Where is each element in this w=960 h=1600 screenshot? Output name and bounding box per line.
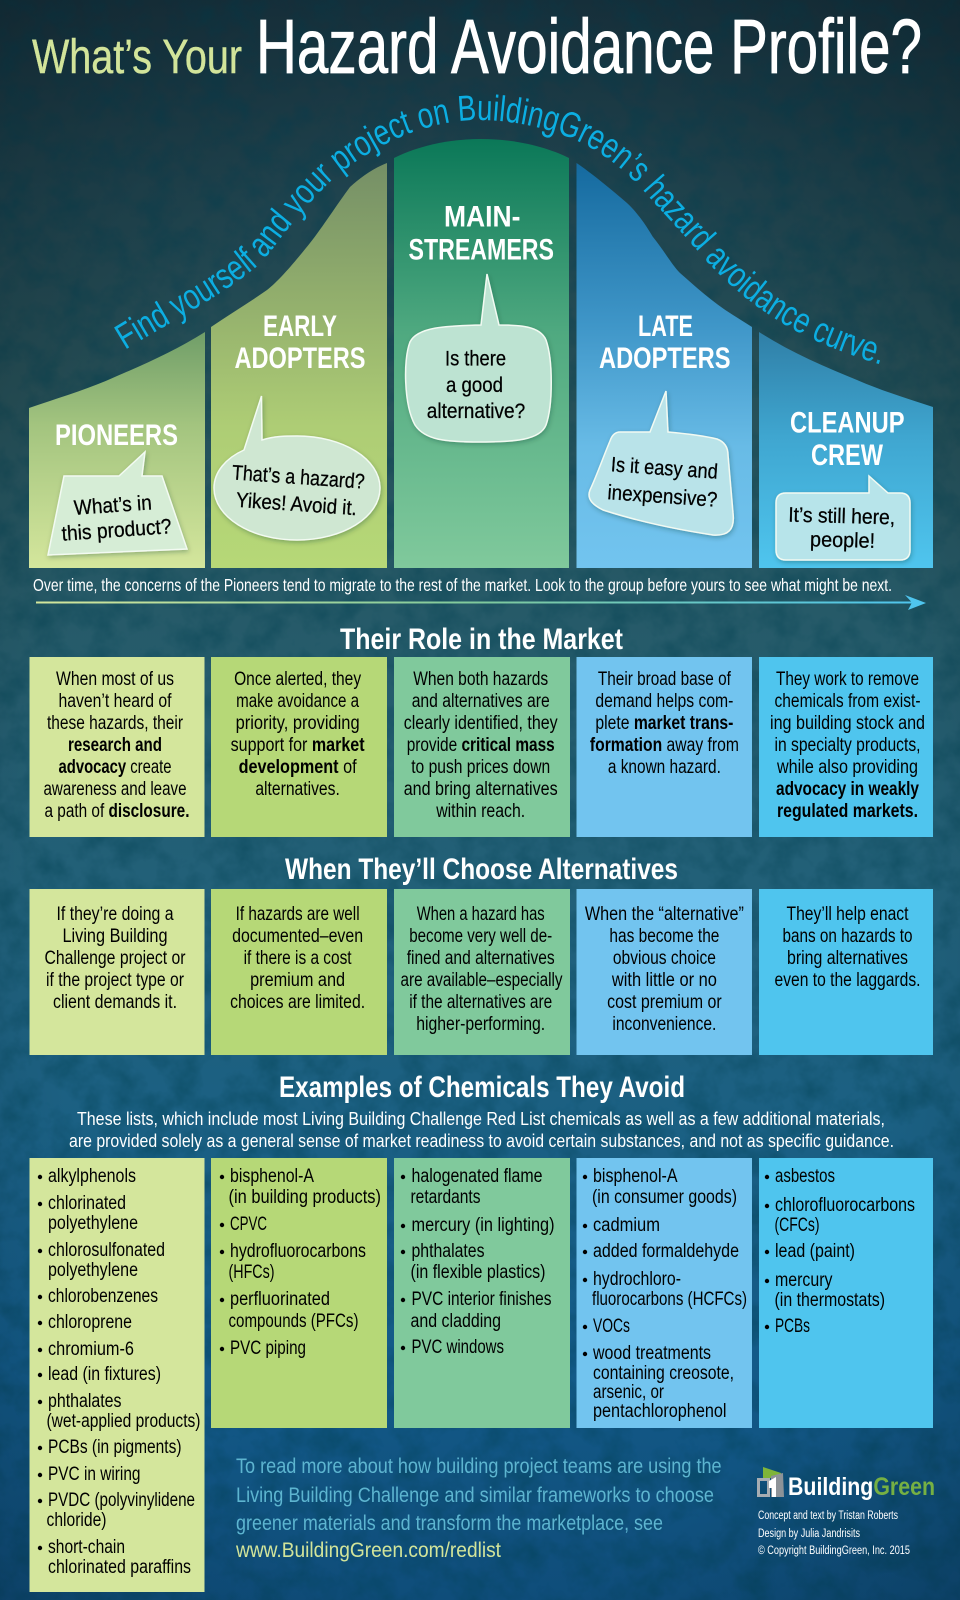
list: pioneers: phthalates [48, 1391, 122, 1412]
role: pioneers: awareness and leave [44, 779, 186, 800]
role: late adopters: plete market trans- [595, 713, 733, 734]
list: pioneers: PCBs (in pigments) [48, 1437, 182, 1458]
role: cleanup crew: while also providing [776, 757, 918, 778]
list: early adopters: bisphenol-A [230, 1166, 314, 1187]
arrow: time [36, 595, 926, 610]
speech bubble: late adopters: Is it easy and [610, 453, 719, 484]
list: cleanup crew: mercury [775, 1270, 833, 1291]
list: mainstreamers: PVC windows [412, 1337, 504, 1358]
role: early adopters: alternatives. [255, 779, 340, 800]
role: early adopters: make avoidance a [236, 691, 359, 712]
speech bubble: early adopters: That’s a hazard? [231, 461, 366, 494]
role: mainstreamers: provide critical mass [407, 735, 555, 756]
when: mainstreamers: When a hazard has [417, 904, 545, 925]
role: late adopters: formation away from [590, 735, 739, 756]
role: mainstreamers: within reach. [435, 801, 525, 822]
speech bubble: mainstreamers: a good [446, 374, 503, 397]
role: pioneers: these hazards, their [47, 713, 184, 734]
list: late adopters: wood treatments [592, 1343, 711, 1364]
speech bubble: mainstreamers [406, 274, 551, 442]
list: pioneers [30, 1158, 204, 1592]
list: late adopters: added formaldehyde [593, 1241, 739, 1262]
when: cleanup crew [759, 889, 933, 1055]
list: pioneers: PVC in wiring [48, 1464, 140, 1485]
list: late adopters: VOCs [593, 1316, 630, 1337]
role: pioneers: When most of us [56, 669, 174, 690]
speech bubble: pioneers: What’s in [73, 491, 153, 520]
role: mainstreamers: and bring alternatives [404, 779, 558, 800]
intro text: lists disclaimer [69, 1108, 894, 1151]
list: pioneers: chlorinated paraffins [48, 1557, 191, 1578]
call to action: read more: greener materials and transform the marketplace, see [236, 1512, 663, 1535]
list: late adopters: pentachlorophenol [593, 1401, 726, 1422]
when: mainstreamers: are available–especially [400, 970, 563, 991]
when: pioneers: client demands it. [53, 992, 177, 1013]
when: mainstreamers: fined and alternatives [407, 948, 555, 969]
role: cleanup crew: regulated markets. [777, 801, 918, 822]
list: mainstreamers [394, 1158, 570, 1428]
when: mainstreamers: if the alternatives are [409, 992, 552, 1013]
role: cleanup crew: They work to remove [776, 669, 919, 690]
list: early adopters: (in building products) [228, 1187, 381, 1208]
when: pioneers [30, 889, 204, 1055]
role: mainstreamers: When both hazards [413, 669, 548, 690]
speech bubble: early adopters: Yikes! Avoid it. [235, 489, 358, 520]
role: cleanup crew: ing building stock and [770, 713, 925, 734]
panel: mainstreamers curve [394, 139, 569, 568]
when: late adopters: inconvenience. [612, 1014, 716, 1035]
role: late adopters: a known hazard. [608, 757, 721, 778]
heading: cleanup crew: CLEANUP [790, 406, 904, 440]
when: pioneers: Living Building [62, 926, 168, 947]
when: pioneers: if the project type or [46, 970, 185, 991]
when: late adopters: cost premium or [607, 992, 722, 1013]
when: pioneers: Challenge project or [44, 948, 186, 969]
heading: mainstreamers: STREAMERS [408, 234, 554, 266]
list: mainstreamers: and cladding [410, 1311, 501, 1332]
list: early adopters: PVC piping [230, 1338, 306, 1359]
list: early adopters: compounds (PFCs) [228, 1311, 358, 1332]
role: mainstreamers: clearly identified, they [404, 713, 558, 734]
panel: late adopters curve [576, 163, 752, 568]
speech bubble: late adopters [589, 391, 733, 535]
list: mainstreamers: phthalates [412, 1241, 484, 1262]
speech bubble: early adopters [214, 396, 380, 540]
list: cleanup crew: PCBs [775, 1316, 810, 1337]
panel: early adopters curve [211, 163, 387, 568]
list: late adopters: bisphenol-A [593, 1166, 678, 1187]
when: late adopters [576, 889, 752, 1055]
list: pioneers: (wet-applied products) [46, 1411, 200, 1432]
speech bubble: pioneers: this product? [61, 515, 172, 546]
speech bubble: late adopters: inexpensive? [607, 481, 718, 512]
role: pioneers [30, 657, 204, 837]
role: pioneers: haven’t heard of [58, 691, 172, 712]
list: early adopters: (HFCs) [228, 1262, 274, 1283]
panel: alternatives row [30, 889, 933, 1055]
list: late adopters: hydrochloro- [593, 1269, 681, 1290]
logo: BuildingGreen [757, 1467, 935, 1501]
when: pioneers: If they’re doing a [56, 904, 174, 925]
credits: Design by Julia Jandrisits [758, 1528, 860, 1540]
list: pioneers: alkylphenols [48, 1166, 136, 1187]
curved subtitle: Find yourself and your project on BuildingGreen’s hazard avoidance curve. [114, 94, 880, 364]
list: pioneers: chloride) [46, 1510, 106, 1531]
role: cleanup crew: in specialty products, [774, 735, 920, 756]
panel: chemical lists [30, 1158, 933, 1592]
when: early adopters [211, 889, 387, 1055]
role: cleanup crew: chemicals from exist- [774, 691, 920, 712]
panel: role row [30, 657, 933, 837]
call to action: read more: www.BuildingGreen.com/redlist [235, 1539, 501, 1562]
role: early adopters: priority, providing [236, 713, 360, 734]
list: late adopters: arsenic, or [593, 1382, 665, 1403]
heading: mainstreamers: MAIN- [444, 200, 520, 234]
credits [758, 1510, 910, 1557]
speech bubble: cleanup crew: people! [810, 528, 875, 553]
role: cleanup crew: advocacy in weakly [776, 779, 919, 800]
list: pioneers: lead (in fixtures) [48, 1364, 161, 1385]
list: late adopters: (in consumer goods) [592, 1187, 737, 1208]
list: cleanup crew: (in thermostats) [774, 1290, 885, 1311]
heading: examples of chemicals: Examples of Chemicals They Avoid [279, 1071, 685, 1104]
when: early adopters: If hazards are well [236, 904, 360, 925]
role: pioneers: a path of disclosure. [44, 801, 190, 822]
role: mainstreamers [394, 657, 570, 837]
heading: mainstreamers [408, 200, 554, 266]
when: late adopters: When the “alternative” [585, 904, 744, 925]
speech bubble: mainstreamers: alternative? [427, 400, 525, 423]
heading: when they'll choose alternatives: When They’ll Choose Alternatives [285, 853, 678, 886]
when: cleanup crew: even to the laggards. [774, 970, 920, 991]
call to action: read more: Living Building Challenge and similar frameworks to choose [236, 1484, 714, 1507]
role: pioneers: advocacy create [58, 757, 172, 778]
list: cleanup crew: chlorofluorocarbons [775, 1195, 915, 1216]
logo: BuildingGreen: BuildingGreen [788, 1473, 935, 1501]
role: late adopters [576, 657, 752, 837]
when: mainstreamers: become very well de- [409, 926, 552, 947]
role: late adopters: Their broad base of [598, 669, 731, 690]
panel: pioneers curve [29, 332, 205, 568]
list: late adopters: containing creosote, [593, 1363, 734, 1384]
list: pioneers: polyethylene [48, 1213, 138, 1234]
heading: early adopters: ADOPTERS [234, 342, 366, 375]
list: pioneers: short-chain [48, 1537, 125, 1558]
heading: cleanup crew [790, 406, 904, 472]
when: mainstreamers: higher-performing. [416, 1014, 545, 1035]
when: late adopters: obvious choice [613, 948, 716, 969]
speech bubble: mainstreamers: Is there [445, 348, 506, 370]
when: early adopters: choices are limited. [230, 992, 365, 1013]
role: early adopters: support for market [231, 735, 365, 756]
list: pioneers: chlorosulfonated [48, 1240, 165, 1261]
list: pioneers: chlorobenzenes [48, 1286, 158, 1307]
role: pioneers: research and [68, 735, 162, 756]
list: late adopters [576, 1158, 752, 1428]
title: What’s Your [32, 31, 242, 84]
role: early adopters: Once alerted, they [234, 669, 362, 690]
role: early adopters: development of [239, 757, 357, 778]
list: cleanup crew: asbestos [775, 1166, 835, 1187]
heading: late adopters: LATE [638, 310, 693, 343]
speech bubble: pioneers [48, 452, 187, 555]
heading: late adopters: ADOPTERS [599, 342, 730, 375]
when: cleanup crew: They’ll help enact [786, 904, 909, 925]
list: late adopters: cadmium [593, 1215, 660, 1236]
role: cleanup crew [759, 657, 933, 837]
list: mainstreamers: mercury (in lighting) [412, 1215, 554, 1236]
list: early adopters: CPVC [230, 1214, 267, 1235]
when: late adopters: with little or no [611, 970, 717, 991]
list: early adopters: perfluorinated [230, 1289, 330, 1310]
role: early adopters [211, 657, 387, 837]
role: late adopters: demand helps com- [595, 691, 733, 712]
list: mainstreamers: PVC interior finishes [412, 1289, 552, 1310]
role: mainstreamers: and alternatives are [412, 691, 550, 712]
icon: building [757, 1467, 784, 1497]
when: late adopters: has become the [609, 926, 719, 947]
list: pioneers: chlorinated [48, 1193, 126, 1214]
when: mainstreamers [394, 889, 570, 1055]
heading: early adopters [234, 310, 366, 375]
heading: their role in the market: Their Role in the Market [340, 623, 623, 656]
when: cleanup crew: bring alternatives [787, 948, 908, 969]
list: cleanup crew: (CFCs) [774, 1215, 820, 1236]
when: early adopters: premium and [250, 970, 345, 991]
when: early adopters: documented–even [232, 926, 363, 947]
role: mainstreamers: to push prices down [411, 757, 550, 778]
list: mainstreamers: (in flexible plastics) [410, 1262, 546, 1283]
list: cleanup crew: lead (paint) [775, 1241, 855, 1262]
list: pioneers: chromium-6 [48, 1339, 134, 1360]
when: cleanup crew: bans on hazards to [782, 926, 912, 947]
heading: late adopters [599, 310, 730, 375]
speech bubble: cleanup crew [776, 476, 910, 560]
heading: pioneers: PIONEERS [55, 419, 178, 452]
list: early adopters: hydrofluorocarbons [230, 1241, 366, 1262]
speech bubble: cleanup crew: It’s still here, [788, 504, 896, 529]
call to action: read more [235, 1455, 722, 1562]
list: pioneers: chloroprene [48, 1312, 132, 1333]
list: early adopters [211, 1158, 387, 1428]
heading: early adopters: EARLY [263, 310, 337, 343]
credits: © Copyright BuildingGreen, Inc. 2015 [758, 1545, 910, 1557]
list: late adopters: fluorocarbons (HCFCs) [592, 1289, 747, 1310]
list: mainstreamers: retardants [410, 1187, 480, 1208]
list: cleanup crew [759, 1158, 933, 1428]
list: pioneers: PVDC (polyvinylidene [48, 1490, 195, 1511]
credits: Concept and text by Tristan Roberts [758, 1510, 898, 1522]
list: mainstreamers: halogenated flame [412, 1166, 542, 1187]
when: early adopters: if there is a cost [244, 948, 352, 969]
call to action: read more: To read more about how building project teams are using the [236, 1455, 722, 1478]
list: pioneers: polyethylene [48, 1260, 138, 1281]
panel: cleanup crew curve [759, 332, 933, 568]
heading: cleanup crew: CREW [811, 439, 884, 472]
